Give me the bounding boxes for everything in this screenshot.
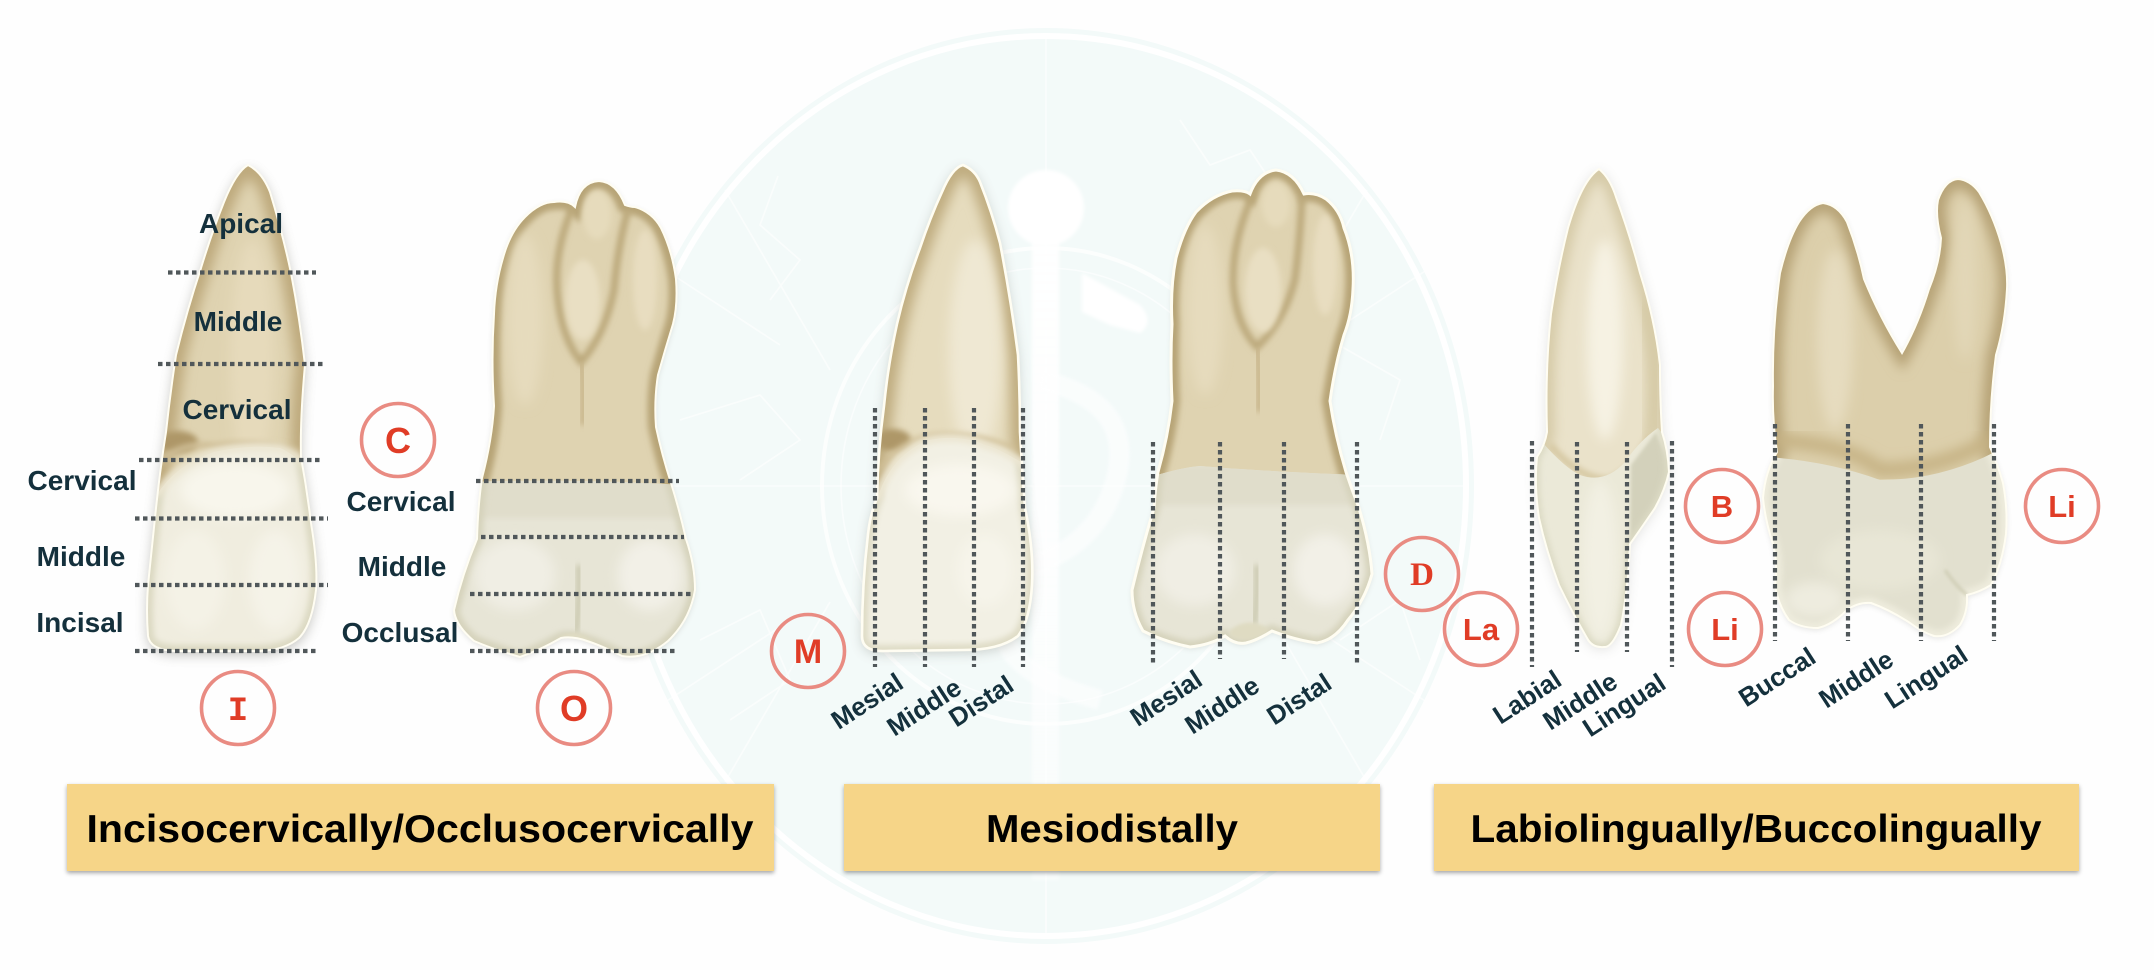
- badge: M: M: [794, 633, 822, 671]
- tooth: molar occlusal view: [1130, 168, 1374, 650]
- badge: Li lower: Li: [1711, 612, 1739, 647]
- label: Cervical crown: Cervical: [28, 465, 136, 496]
- label: Distal molar: Distal: [1261, 667, 1337, 731]
- badge: B: B: [1711, 489, 1733, 524]
- watermark: faint circular medical emblem: [618, 28, 1474, 944]
- label: Occlusal: Occlusal: [342, 617, 458, 648]
- badge: La: La: [1463, 612, 1500, 647]
- badge: La: [1444, 592, 1518, 666]
- badge: B: [1686, 470, 1758, 542]
- label: Apical: Apical: [199, 208, 283, 239]
- label: Middle molar: Middle: [1179, 670, 1265, 740]
- label: Middle molar: Middle: [358, 551, 446, 582]
- banner: Mesiodistally: Mesiodistally: [986, 808, 1238, 851]
- badge: C: C: [385, 420, 411, 461]
- banner: Incisocervically/Occlusocervically: Incisocervically/Occlusocervically: [86, 808, 754, 851]
- horizontal dotted thirds on anterior tooth: [135, 272, 328, 651]
- banner: Labiolingually/Buccolingually: Labiolingually/Buccolingually: [1470, 808, 2042, 851]
- label: Lingual molar: Lingual: [1879, 639, 1973, 715]
- label: Cervical root: Cervical: [183, 394, 291, 425]
- label: Middle crown: Middle: [37, 541, 125, 572]
- badge: M: [772, 614, 844, 688]
- label: Middle: Middle: [1537, 666, 1623, 736]
- banner: Mesiodistally: [844, 784, 1380, 871]
- label: Distal: Distal: [943, 669, 1019, 733]
- tooth: anterior tooth facial view: [850, 160, 1045, 670]
- horizontal dotted thirds on molar: [470, 481, 691, 651]
- vertical dotted thirds on anterior tooth: [875, 408, 1023, 667]
- label: Cervical molar: Cervical: [347, 486, 455, 517]
- vertical dotted thirds on molar: [1775, 424, 1994, 641]
- badge: Li right: [2026, 470, 2098, 542]
- badge: Li lower: [1688, 592, 1762, 666]
- label: Mesial molar: Mesial: [1124, 664, 1208, 732]
- vertical dotted thirds on molar: [1153, 442, 1357, 666]
- panel: Incisocervically/Occlusocervically: [28, 160, 774, 871]
- tooth: anterior tooth proximal view: [1532, 168, 1672, 652]
- label: Incisal: Incisal: [36, 607, 124, 638]
- label: Mesial: Mesial: [825, 667, 909, 735]
- badge: I: [202, 672, 274, 744]
- badge: D: [1386, 538, 1458, 610]
- panel: Labiolingually/Buccolingually: [1434, 160, 2098, 871]
- label: Middle root: Middle: [194, 306, 282, 337]
- badge: C: [362, 404, 434, 476]
- tooth: anterior tooth facial view: [140, 164, 323, 662]
- badge: D: D: [1410, 557, 1434, 593]
- panel: Mesiodistally: [772, 160, 1458, 871]
- label: Middle molar: Middle: [1813, 644, 1899, 714]
- badge: Li right: Li: [2048, 489, 2076, 524]
- badge: O: [538, 672, 610, 744]
- vertical dotted thirds on anterior tooth: [1532, 441, 1672, 667]
- label: Buccal: Buccal: [1733, 641, 1821, 713]
- banner: Incisocervically/Occlusocervically: [67, 784, 774, 871]
- tooth: molar proximal view: [1762, 178, 2009, 640]
- label: Labial: Labial: [1487, 664, 1567, 730]
- label: Middle: Middle: [881, 672, 967, 742]
- badge: O: O: [560, 688, 588, 729]
- label: Lingual: Lingual: [1577, 667, 1671, 743]
- banner: Labiolingually/Buccolingually: [1434, 784, 2079, 871]
- badge: I: I: [228, 693, 248, 731]
- tooth: molar occlusal view: [452, 180, 696, 660]
